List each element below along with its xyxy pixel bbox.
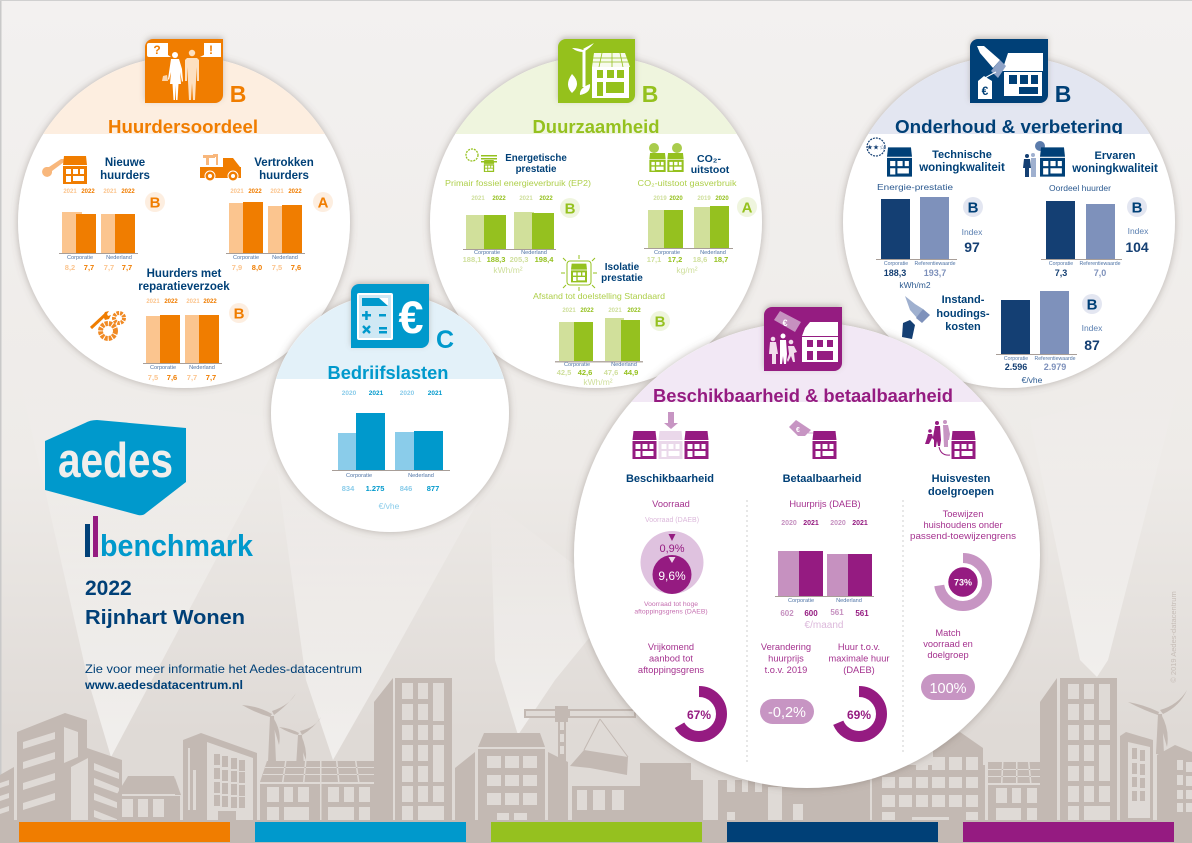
sub-section: Huurders met reparatieverzoek: 2021 [146,299,160,305]
column: Huisvesten doelgroepen: Match [935,628,961,638]
sub-section: Nieuwe huurders: Nieuwe [105,157,145,169]
sub-section: Ervaren woningkwaliteit [1023,141,1158,278]
sub-section: Nieuwe huurders: 2022 [81,189,95,195]
text block: meer informatie: Zie voor meer informatie het Aedes-datacentrum [85,662,362,676]
sub-section: Isolatie prestatie: Corporatie [564,362,590,368]
panel: Bedrijfslasten: Nederland [408,473,434,479]
sub-section: Energetische prestatie: Corporatie [474,250,500,256]
sub-section: CO2-uitstoot: Corporatie [654,250,680,256]
sub-section: Isolatie prestatie: Afstand tot doelstelling Standaard [533,291,665,301]
sub-section: Vertrokken huurders: Nederland [272,255,298,261]
sub-section: Vertrokken huurders [200,154,333,272]
sub-section: Nieuwe huurders [42,156,165,272]
panel: Beschikbaarheid en betaalbaarheid [574,307,1040,788]
sub-section: Technische woningkwaliteit: kWh/m2 [899,280,931,290]
grade C: C [436,326,454,354]
icon: people and house [1023,141,1065,177]
grade B: B [230,81,246,107]
chart: voorraad circles: 9,6% [658,569,686,583]
sub-section: Ervaren woningkwaliteit: woningkwaliteit [1071,163,1158,175]
column: Betaalbaarheid: 602 [780,609,794,618]
colour bar purple [963,822,1174,842]
panel: Bedrijfslasten: 834 [342,484,355,493]
column: Betaalbaarheid: 561 [855,609,869,618]
column: Betaalbaarheid: 600 [804,609,818,618]
column: Beschikbaarheid: Beschikbaarheid [626,473,714,485]
column: Beschikbaarheid: Voorraad [652,499,690,509]
column: Beschikbaarheid: aanbod tot [649,654,693,664]
grade B: B [1055,81,1071,107]
icon: brush and price tag [902,296,930,339]
icon: wrench and gears [91,311,124,338]
sub-section: Huurders met reparatieverzoek: Huurders met [147,268,222,280]
sub-section: Vertrokken huurders: 7,9 [232,263,242,272]
heading: Duurzaamheid: Duurzaamheid [532,116,660,137]
sub-section: Huurders met reparatieverzoek: Corporatie [150,365,176,371]
icon: huurders tile [145,39,223,103]
sub-section: Huurders met reparatieverzoek: 7,5 [148,373,158,382]
icon: wind turbines [242,693,321,767]
column: Beschikbaarheid: aftoppingsgrens (DAEB) [634,608,708,616]
sub-section: Vertrokken huurders: 8,0 [252,263,262,272]
sub-section: Nieuwe huurders: 7,7 [84,263,94,272]
heading: Bedrijfslasten: Bedrijfslasten [328,362,448,383]
column: Beschikbaarheid [626,412,722,736]
sub-section: Ervaren woningkwaliteit: Index [1128,226,1149,236]
panel: Bedrijfslasten [271,284,509,532]
column: Huisvesten doelgroepen: doelgroep [927,650,969,660]
icon: key and house [42,156,87,184]
heading: Onderhoud & verbetering: Onderhoud & verbetering [895,116,1123,137]
sub-section: Technische woningkwaliteit: Technische [932,149,992,161]
sub-section: Isolatie prestatie: Isolatie [605,262,640,273]
pill: -0,2% [760,699,814,724]
panel: Bedrijfslasten: 2020 [400,390,415,397]
sub-section: Vertrokken huurders: Vertrokken [254,157,314,169]
icon: family and house [925,420,976,459]
sub-section: Ervaren woningkwaliteit: 7,3 [1055,268,1067,278]
icon: onderhoud tile [970,39,1048,103]
copyright: © 2019 Aedes-datacentrum [1169,591,1178,683]
column: Betaalbaarheid: 2021 [852,520,868,527]
sub-section: Instandhoudingskosten: Index [1082,323,1103,333]
grade B: B [642,81,658,107]
column: Betaalbaarheid: 561 [830,608,844,617]
panel: Bedrijfslasten: 846 [400,484,412,493]
sub-section: Energetische prestatie [445,149,591,275]
sub-section: Energetische prestatie: Nederland [521,250,547,256]
bar chart: CO2 [644,206,733,249]
sub-section: Technische woningkwaliteit: woningkwaliteit [918,162,1005,174]
sub-section: Technische woningkwaliteit: Corporatie [884,261,908,267]
panel: Bedrijfslasten: 2020 [342,390,357,397]
column: Huisvesten doelgroepen: voorraad en [923,639,973,649]
crane [524,706,636,775]
logo: aedes [45,420,186,515]
icon: calculator and euro tile [351,284,429,348]
sub-section: Vertrokken huurders: 2022 [288,189,302,195]
sub-section: Nieuwe huurders: 7,7 [122,263,132,272]
sub-section: Technische woningkwaliteit: Referentiewaarde [915,261,956,267]
sub-section: Isolatie prestatie: 42,5 [557,368,571,377]
sub-section: CO2-uitstoot: A [742,200,753,216]
sub-section: Energetische prestatie: Energetische [505,153,567,164]
sub-section: Isolatie prestatie: 2021 [562,308,576,314]
chart: voorraad circles: 0,9% [659,543,685,555]
sub-section: CO2-uitstoot: kg/m² [676,265,698,275]
sub-section: CO2-uitstoot: 18,6 [693,255,707,264]
sub-section: Technische woningkwaliteit: 97 [964,239,980,255]
panel: Huurdersoordeel [18,39,350,388]
sub-section: Instandhoudingskosten: Referentiewaarde [1035,356,1076,362]
sub-section: Huurders met reparatieverzoek [91,268,249,382]
logo: benchmark: benchmark [100,528,254,563]
sub-section: Energetische prestatie: Primair fossiel energieverbruik (EP2) [445,178,591,188]
sub-section: Nieuwe huurders: huurders [100,170,150,182]
panel: Bedrijfslasten: Corporatie [346,473,372,479]
column: Huisvesten doelgroepen: Toewijzen [943,509,983,519]
sub-section: Ervaren woningkwaliteit: 7,0 [1094,268,1106,278]
heading: Beschikbaarheid & betaalbaarheid: Beschikbaarheid & betaalbaarheid [653,385,953,406]
chart: donut 73% [939,558,987,606]
column: Betaalbaarheid: t.o.v. 2019 [765,665,807,675]
pill: 100% [921,674,975,700]
column: Betaalbaarheid: Nederland [836,598,862,604]
colour bar orange [19,822,230,842]
panel: Bedrijfslasten: 2021 [428,390,443,397]
column: Betaalbaarheid: Betaalbaarheid [783,473,861,485]
sub-section: Technische woningkwaliteit: 193,7 [924,268,946,278]
sub-section: Vertrokken huurders: 7,5 [272,263,282,272]
chart: donut 73%: 73% [954,578,972,588]
sub-section: Isolatie prestatie: 47,6 [604,368,618,377]
icon: stars and house: ★★☆ [867,144,885,152]
sub-section: Nieuwe huurders: Corporatie [67,255,93,261]
icon: moving truck [200,154,241,181]
sub-section: Nieuwe huurders: 7,7 [104,263,114,272]
sub-section: Nieuwe huurders: 2022 [121,189,135,195]
sub-section: Energetische prestatie: 2021 [519,196,533,202]
sub-section: Instandhoudingskosten: houdings- [936,308,990,320]
colour bar blue [255,822,466,842]
sub-section: Isolatie prestatie: 2022 [580,308,594,314]
icon: beschikbaarheid tile: € [782,318,788,328]
panel: Bedrijfslasten: 1.275 [366,484,384,493]
sub-section: Isolatie prestatie: 42,6 [578,368,592,377]
text block: meer informatie [84,662,362,692]
logo: aedes: aedes [58,434,173,488]
sub-section: Huurders met reparatieverzoek: B [234,306,245,322]
pill: 100%: 100% [929,681,967,697]
icon: insulated house [561,255,597,291]
column: Betaalbaarheid: Corporatie [788,598,814,604]
sub-section: Instandhoudingskosten: B [1087,296,1098,314]
icon: huurders tile: ! [209,43,213,57]
column: Betaalbaarheid: huurprijs [768,654,804,664]
sub-section: Vertrokken huurders: 2021 [230,189,244,195]
column: Huisvesten doelgroepen [910,420,1016,700]
sub-section: Huurders met reparatieverzoek: Nederland [189,365,215,371]
sub-section: CO2-uitstoot: 2019 [697,196,711,202]
sub-section: CO2-uitstoot: CO₂- [697,153,721,165]
sub-section: Energetische prestatie: B [565,200,576,218]
sub-section: Isolatie prestatie: B [655,314,666,330]
sub-section: Vertrokken huurders: 7,6 [291,263,301,272]
bar chart: Vertrokken huurders [226,202,305,254]
sub-section: Technische woningkwaliteit: Index [962,227,983,237]
sub-section: CO2-uitstoot: 18,7 [714,255,728,264]
bar chart: Nieuwe huurders [59,212,138,254]
column: Huisvesten doelgroepen: doelgroepen [928,486,994,498]
sub-section: CO2-uitstoot: CO₂-uitstoot gasverbruik [638,178,737,188]
sub-section: Nieuwe huurders: 8,2 [65,263,75,272]
panel: Duurzaamheid [430,39,762,388]
icon: price tag and house: € [796,427,800,434]
bar chart: Isolatie [555,318,643,362]
sub-section: Isolatie prestatie: prestatie [601,273,643,284]
sub-section: Huurders met reparatieverzoek: 2021 [186,299,200,305]
sub-section: Vertrokken huurders: Corporatie [233,255,259,261]
sub-section: Instandhoudingskosten: kosten [945,321,981,333]
sub-section: Huurders met reparatieverzoek: reparatieverzoek [138,281,230,293]
sub-section: Energetische prestatie: 2021 [471,196,485,202]
column: Betaalbaarheid: 2020 [830,520,846,527]
icon: huurders tile: ? [153,43,161,57]
title block: 2022 Rijnhart Wonen: 2022 [85,577,132,600]
sub-section: CO2-uitstoot: Nederland [700,250,726,256]
sub-section: Instandhoudingskosten: 87 [1084,337,1100,353]
sub-section: Nieuwe huurders: Nederland [106,255,132,261]
icon: wind turbine right [1128,690,1187,754]
colour bar navy [727,822,938,842]
bar chart: reparatieverzoek [143,315,222,364]
sub-section: Energetische prestatie: 188,1 [463,255,481,264]
sub-section: Nieuwe huurders: B [150,194,161,212]
bar chart: Instandhoudingskosten [996,291,1077,355]
sub-section: Ervaren woningkwaliteit: 104 [1125,239,1149,255]
column: Betaalbaarheid [760,420,889,736]
panel: Bedrijfslasten: €/vhe [379,501,400,511]
sub-section: Instandhoudingskosten: 2.596 [1005,362,1027,372]
skyline illustration [0,678,1192,843]
icon: calculator and euro tile: € [398,292,424,343]
sub-section: CO2-uitstoot [638,143,757,275]
bar chart: EP2 [463,212,556,250]
sub-section: Huurders met reparatieverzoek: 2022 [203,299,217,305]
sub-section: CO2-uitstoot: 17,1 [647,255,661,264]
sub-section: Energetische prestatie: 2022 [492,196,506,202]
bar chart: Bedrijfslasten [332,413,450,471]
text block: meer informatie: www.aedesdatacentrum.nl [84,678,243,692]
column: Beschikbaarheid: Voorraad tot hoge [644,601,698,608]
panel: Bedrijfslasten: 877 [427,484,439,493]
sub-section: Ervaren woningkwaliteit: Oordeel huurder [1049,183,1111,193]
icon: energy label house [466,149,497,172]
chart: donut 67%: 67% [687,708,711,722]
panel: Onderhoud en verbetering [843,39,1175,388]
sub-section: Instandhoudingskosten: Corporatie [1004,356,1028,362]
sub-section: Ervaren woningkwaliteit: Referentiewaarde [1080,261,1121,267]
sub-section: Isolatie prestatie [533,255,670,387]
bar chart: Energie-prestatie [876,197,957,260]
sub-section: Huurders met reparatieverzoek: 2022 [164,299,178,305]
sub-section: Vertrokken huurders: 2021 [270,189,284,195]
icon: price tag and house [789,420,836,459]
sub-section: Technische woningkwaliteit: Energie-prestatie [877,182,953,192]
column: Betaalbaarheid: Huur t.o.v. [838,642,880,652]
sub-section: CO2-uitstoot: uitstoot [691,164,730,176]
logo: benchmark [85,516,254,563]
colour bar green [491,822,702,842]
sub-section: Isolatie prestatie: 44,9 [624,368,638,377]
sub-section: Isolatie prestatie: 2022 [627,308,641,314]
column: Betaalbaarheid: Huurprijs (DAEB) [789,499,861,509]
sub-section: CO2-uitstoot: 2020 [669,196,683,202]
sub-section: Energetische prestatie: 198,4 [535,255,554,264]
sub-section: Instandhoudingskosten [902,291,1103,385]
sub-section: Ervaren woningkwaliteit: Ervaren [1095,150,1136,162]
sub-section: Technische woningkwaliteit: 188,3 [884,268,906,278]
pill: -0,2%: -0,2% [768,705,806,721]
column: Huisvesten doelgroepen: passend-toewijzengrens [910,531,1016,541]
sub-section: Huurders met reparatieverzoek: 7,6 [167,373,177,382]
column: Beschikbaarheid: Vrijkomend [648,642,694,652]
sub-section: Energetische prestatie: 2022 [539,196,553,202]
sub-section: Technische woningkwaliteit [867,138,1005,290]
sub-section: Vertrokken huurders: huurders [259,170,309,182]
chart: donut 69%: 69% [847,708,871,722]
sub-section: Vertrokken huurders: A [318,194,329,212]
column: Betaalbaarheid: maximale huur [829,654,889,664]
chart: donut 69% [836,692,882,736]
chart: voorraad circles [640,531,704,594]
sub-section: Nieuwe huurders: 2021 [103,189,117,195]
icon: onderhoud tile: € [982,84,989,98]
sub-section: Instandhoudingskosten: 2.979 [1044,362,1066,372]
sub-section: Instandhoudingskosten: Instand- [942,294,985,306]
title block: 2022 Rijnhart Wonen: Rijnhart Wonen [85,607,245,629]
sub-section: Huurders met reparatieverzoek: 7,7 [206,373,216,382]
column: Betaalbaarheid: 2021 [803,520,819,527]
icon: arrow and row of houses [632,412,708,459]
sub-section: Vertrokken huurders: 2022 [248,189,262,195]
icon: CO2 houses [649,143,684,172]
sub-section: Ervaren woningkwaliteit: B [1132,200,1143,216]
sub-section: Huurders met reparatieverzoek: 7,7 [187,373,197,382]
sub-section: Nieuwe huurders: 2021 [63,189,77,195]
sub-section: Energetische prestatie: prestatie [516,164,557,175]
column: Betaalbaarheid: 2020 [781,520,797,527]
column: Betaalbaarheid: €/maand [805,620,843,631]
icon: beschikbaarheid tile [764,307,842,371]
column: Beschikbaarheid: Voorraad (DAEB) [645,517,699,524]
sub-section: Energetische prestatie: 205,3 [510,255,528,264]
sub-section: CO2-uitstoot: 2020 [715,196,729,202]
sub-section: Isolatie prestatie: kWh/m² [583,377,613,387]
sub-section: CO2-uitstoot: 17,2 [668,255,682,264]
column: Huisvesten doelgroepen: Huisvesten [932,473,991,485]
icon: stars and house [867,138,912,177]
sub-section: Technische woningkwaliteit: B [968,200,979,216]
panel: Bedrijfslasten: 2021 [369,390,384,397]
column: Beschikbaarheid: aftoppingsgrens [638,665,704,675]
bar chart: Oordeel huurder [1041,201,1122,260]
chart: donut 67% [676,692,722,736]
title block: 2022 Rijnhart Wonen [85,577,245,629]
sub-section: Energetische prestatie: 188,3 [487,255,505,264]
column: Huisvesten doelgroepen: huishoudens onder [923,520,1003,530]
sub-section: Isolatie prestatie: Nederland [611,362,637,368]
sub-section: Isolatie prestatie: 2021 [608,308,622,314]
icon: duurzaamheid tile [558,39,635,103]
sub-section: Instandhoudingskosten: €/vhe [1022,375,1043,385]
sub-section: CO2-uitstoot: 2019 [653,196,667,202]
column: Betaalbaarheid: (DAEB) [843,665,875,675]
heading: Huurdersoordeel: Huurdersoordeel [108,116,258,137]
column: Betaalbaarheid: Verandering [761,642,811,652]
bar chart: Huurprijs [775,551,874,597]
sub-section: Ervaren woningkwaliteit: Corporatie [1049,261,1073,267]
sub-section: Energetische prestatie: kWh/m² [493,265,523,275]
